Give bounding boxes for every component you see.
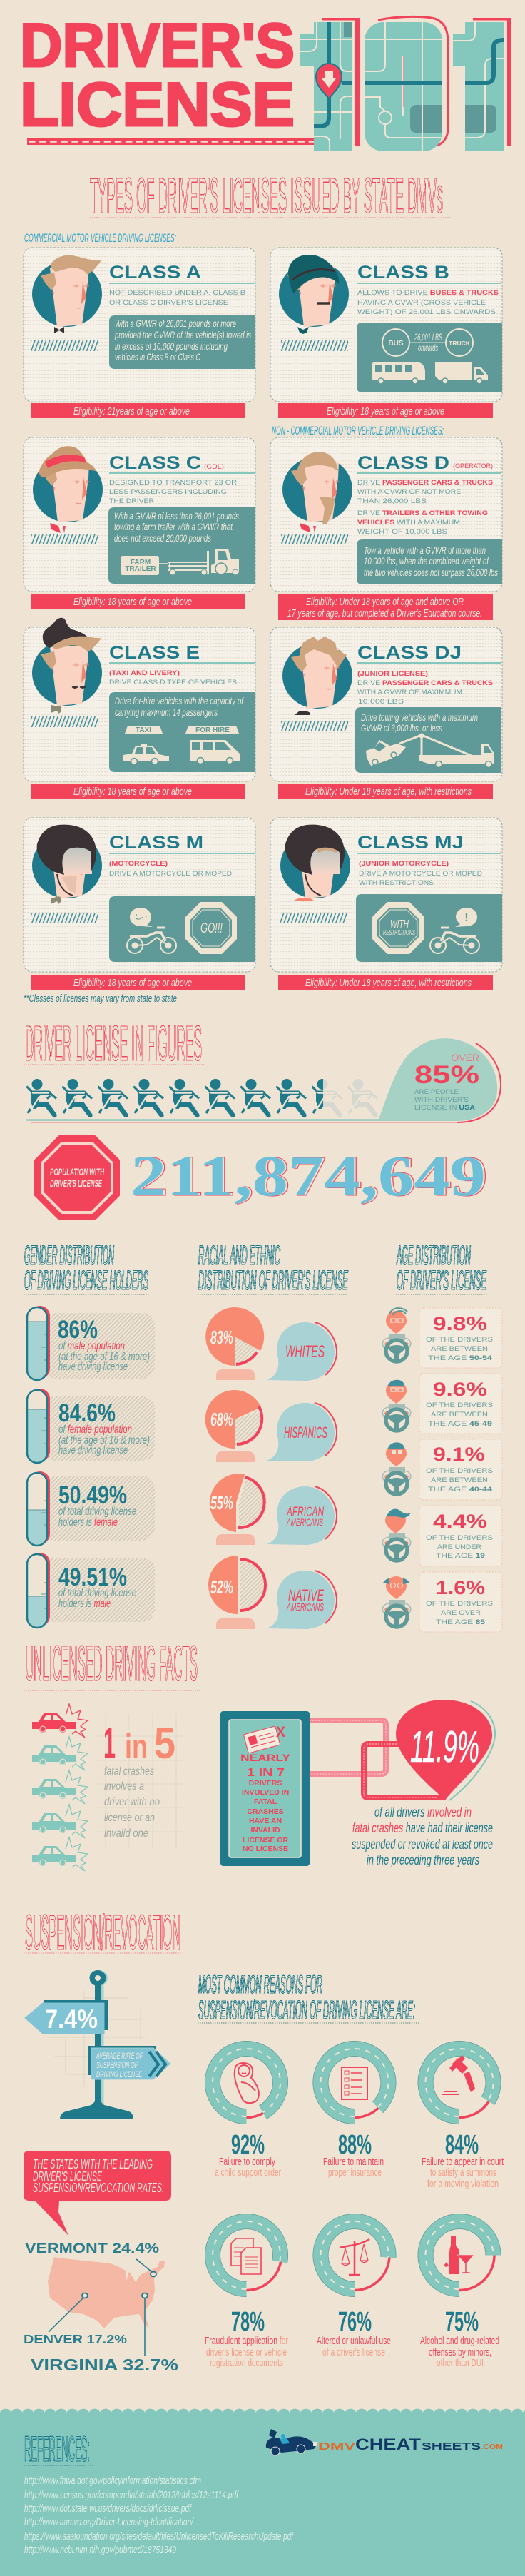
age stat: under 19 bbox=[382, 1506, 502, 1566]
description: class A: OR CLASS C DIRVER'S LICENSE bbox=[109, 299, 228, 307]
stat: 1 in 5: driver with no bbox=[104, 1796, 160, 1808]
info box: class B: 26,001 LBS bbox=[414, 331, 442, 343]
icon: senior driver bbox=[382, 1576, 411, 1627]
age stat: over 85 bbox=[382, 1572, 502, 1632]
logo: dmv cheatsheets: .COM bbox=[481, 2443, 503, 2451]
icon: baby bbox=[235, 2063, 259, 2103]
title: DRIVER'S bbox=[20, 11, 295, 80]
eligibility: class MJ bbox=[278, 975, 493, 990]
text: OF DRIVING LICENSE HOLDERS bbox=[24, 1266, 148, 1296]
age stat: 50-54: ARE BETWEEN bbox=[431, 1345, 488, 1353]
description: class E: DRIVE CLASS D TYPE OF VEHICLES bbox=[109, 679, 237, 686]
gender stat: 84.6 percent female: 84.6% bbox=[58, 1399, 116, 1427]
info box: class D bbox=[357, 539, 502, 584]
callout: leading states bbox=[24, 2151, 171, 2236]
reason: fraud 78 percent: driver's license or vehicle bbox=[206, 2346, 287, 2358]
icon: bottle and glass bbox=[444, 2236, 474, 2274]
age stat: 50-54: 9.8% bbox=[433, 1313, 487, 1334]
icon: tractor with trailer bbox=[159, 549, 239, 575]
age stat: 45-49: OF THE DRIVERS bbox=[426, 1401, 493, 1409]
gender stat: 50.49 percent female: of total driving license bbox=[58, 1506, 136, 1518]
portrait: class A driver bbox=[32, 255, 102, 333]
eligibility: class D: Eligibility: Under 18 years of age and above OR bbox=[306, 596, 464, 608]
reason: alcohol 75 percent: other than DUI bbox=[437, 2357, 484, 2369]
icon: driver with glasses bbox=[382, 1380, 411, 1431]
stat: 1 in 5: 5 bbox=[154, 1719, 175, 1768]
gender stat: 84.6 percent female bbox=[27, 1389, 155, 1463]
map: usa with state labels: VIRGINIA 32.7% bbox=[31, 2356, 178, 2374]
pie: whites 83 percent: 83% bbox=[210, 1327, 233, 1348]
signpost: 7.4 percent bbox=[25, 1970, 170, 2119]
logo: dmv cheatsheets: SHEETS bbox=[422, 2440, 481, 2453]
text: COMMERCIAL MOTOR VEHICLE DRIVING LICENSES: bbox=[24, 231, 176, 245]
road line under title bbox=[27, 138, 314, 145]
stat: 1 in 5: in bbox=[125, 1728, 148, 1766]
panel: nearly 1 in 7: INVALID bbox=[250, 1826, 280, 1835]
icon: five crashed cars bbox=[32, 1704, 88, 1871]
big number: 211,874,649 bbox=[133, 1145, 488, 1208]
portrait: class M rider with helmet bbox=[32, 825, 102, 904]
icon: tow truck bbox=[366, 734, 494, 768]
eligibility: class B: Eligibility: 18 years of age or above bbox=[327, 405, 444, 417]
info box: class C: TRAILER bbox=[125, 565, 156, 573]
stat: 1 in 5: invalid one bbox=[104, 1827, 148, 1840]
reason: fraud 78 percent: registration documents bbox=[210, 2357, 283, 2369]
icon: go sign bbox=[185, 902, 237, 954]
panel: nearly 1 in 7: X bbox=[276, 1724, 285, 1740]
panel: class M bbox=[24, 818, 255, 990]
description: class MJ: (JUNIOR MOTORCYCLE) bbox=[359, 860, 449, 868]
description: class DJ: (JUNIOR LICENSE) bbox=[357, 670, 428, 678]
description: class A bbox=[109, 289, 245, 307]
gender stat: 50.49 percent female: holders is female bbox=[58, 1516, 118, 1528]
description: class D: WEIGHT OF 10,000 LBS bbox=[357, 528, 447, 536]
description: class M: DRIVE A MOTORCYCLE OR MOPED bbox=[109, 870, 232, 878]
stat: 1 in 5: involves a bbox=[104, 1780, 144, 1792]
icon: motorcycle bbox=[430, 928, 479, 953]
text: GENDER DISTRIBUTION bbox=[24, 1241, 114, 1271]
info box: class E: TAXI bbox=[136, 726, 151, 734]
panel: class E bbox=[24, 618, 255, 799]
icon: documents bbox=[231, 2238, 261, 2274]
heading: age distribution bbox=[396, 1241, 488, 1296]
info box: class E: Drive for-hire vehicles with the capacity of bbox=[115, 695, 244, 706]
logo: dmv cheatsheets: CHEAT bbox=[355, 2435, 422, 2453]
description: class DJ: WITH A GVWR OF MAXIMMUM bbox=[357, 689, 462, 696]
description: class E bbox=[109, 669, 237, 686]
icon: alert bubble: ! bbox=[464, 911, 469, 924]
gender stat: 49.51 percent male bbox=[27, 1553, 155, 1628]
callout: leading states: THE STATES WITH THE LEADING bbox=[33, 2157, 153, 2171]
map: usa with state labels: VERMONT 24.4% bbox=[25, 2241, 159, 2256]
logo: dmv cheatsheets: DMV bbox=[318, 2440, 355, 2453]
description: class DJ: 10,000 LBS bbox=[358, 698, 404, 706]
gender stat: 49.51 percent male: holders is male bbox=[58, 1598, 111, 1610]
icon: smile bubble bbox=[130, 908, 153, 927]
title bbox=[20, 11, 295, 139]
icon: restrictions sign: WITH bbox=[390, 918, 409, 930]
stop sign: population with driver's license: DRIVER'S LICENSE bbox=[50, 1177, 102, 1189]
age stat: over 85: 1.6% bbox=[436, 1577, 485, 1598]
eligibility: class D bbox=[278, 594, 493, 620]
callout: leading states: SUSPENSION/REVOCATION RATES: bbox=[33, 2181, 164, 2195]
map: usa with state labels bbox=[24, 2241, 178, 2374]
info box: class B: TRUCK bbox=[449, 340, 471, 347]
info box: class C bbox=[108, 507, 255, 584]
panel: nearly 1 in 7: LICENSE OR bbox=[243, 1836, 288, 1845]
description: class B: HAVING A GVWR (GROSS VEHICLE bbox=[357, 299, 486, 307]
description: class DJ: DRIVE PASSENGER CARS & TRUCKS bbox=[357, 679, 493, 687]
info box: class A: provided the GVWR of the vehicle(s) towed is bbox=[114, 329, 251, 340]
panel: class B bbox=[270, 248, 502, 418]
pie: african americans 55 percent: AFRICAN bbox=[286, 1505, 324, 1520]
eligibility: class E bbox=[31, 784, 245, 799]
heading: class D bbox=[357, 453, 493, 473]
description: class C: THE DRIVER bbox=[109, 497, 154, 505]
map: usa with state labels: DENVER 17.2% bbox=[24, 2332, 127, 2346]
info box: class A: With a GVWR of 26,001 pounds or more bbox=[115, 318, 236, 329]
age stat: under 19: OF THE DRIVERS bbox=[426, 1534, 493, 1542]
reason: insurance 88 percent bbox=[320, 2049, 388, 2179]
eligibility: class C bbox=[31, 594, 245, 609]
reason: insurance 88 percent: Failure to maintain bbox=[323, 2156, 384, 2168]
icon: alert bubble bbox=[455, 908, 477, 927]
heading: class M: CLASS M bbox=[109, 833, 203, 853]
icon: taxi bbox=[123, 744, 169, 765]
reason: child support 92 percent: Failure to comply bbox=[219, 2156, 275, 2168]
icon: gavel bbox=[442, 2055, 475, 2095]
eligibility: class B bbox=[278, 403, 493, 418]
description: class D bbox=[357, 479, 493, 536]
eligibility: class A: Eligibility: 21years of age or above bbox=[73, 405, 190, 417]
pie: whites 83 percent: WHITES bbox=[285, 1342, 325, 1361]
callout: over 85 percent: LICENSE IN USA bbox=[414, 1104, 475, 1112]
panel: nearly 1 in 7: HAVE AN bbox=[249, 1817, 282, 1825]
reason: insurance 88 percent: proper insurance bbox=[328, 2166, 382, 2179]
panel: nearly 1 in 7: 1 IN 7 bbox=[247, 1767, 285, 1779]
reason: child support 92 percent: 92% bbox=[231, 2130, 265, 2160]
icon: go sign: GO!!! bbox=[200, 921, 223, 936]
pin: 11.9 percent bbox=[396, 1700, 495, 1800]
description: class MJ: DRIVE A MOTORCYCLE OR MOPED bbox=[359, 870, 482, 878]
gender stat: 84.6 percent female: (at the age of 16 & more) bbox=[58, 1434, 150, 1446]
stat: 1 in 5: license or an bbox=[104, 1812, 155, 1824]
reason: court 84 percent: 84% bbox=[445, 2130, 479, 2160]
panel: nearly 1 in 7: NEARLY bbox=[240, 1753, 290, 1763]
tube gauge bbox=[27, 1306, 50, 1380]
callout: leading states: DRIVER'S LICENSE bbox=[33, 2169, 103, 2184]
description: class E: (TAXI AND LIVERY) bbox=[109, 669, 180, 677]
portrait: class DJ driver bbox=[282, 637, 352, 715]
description: class C: DESIGNED TO TRANSPORT 23 OR bbox=[109, 479, 237, 487]
age stat: under 19: 4.4% bbox=[433, 1511, 487, 1532]
icon: older driver with glasses bbox=[382, 1308, 411, 1361]
reason: child support 92 percent bbox=[213, 2049, 281, 2179]
gender stat: 50.49 percent female: 50.49% bbox=[58, 1481, 127, 1509]
info box: class A: in excess of 10,000 pounds including bbox=[115, 340, 228, 352]
description: class MJ: WITH RESTRICTIONS bbox=[359, 879, 434, 887]
panel: nearly 1 in 7: FATAL bbox=[254, 1797, 277, 1806]
stat: 1 in 5: fatal crashes bbox=[104, 1765, 154, 1778]
info box: class A: vehicles in Class B or Class C bbox=[115, 351, 201, 362]
info box: class E: carrying maximum 14 passengers bbox=[115, 706, 218, 718]
text: suspended or revoked: of all drivers involved in bbox=[374, 1805, 472, 1820]
portrait: class MJ rider with helmet bbox=[280, 825, 350, 901]
icon: checklist bbox=[342, 2067, 367, 2099]
tube gauge bbox=[27, 1389, 50, 1463]
pie: hispanics 68 percent bbox=[205, 1390, 337, 1462]
info box: class B: BUS bbox=[388, 340, 404, 348]
eligibility: class C: Eligibility: 18 years of age or above bbox=[73, 596, 192, 608]
callout: over 85 percent: OVER bbox=[451, 1052, 479, 1063]
portrait: class E driver bbox=[32, 618, 102, 714]
info box: class E bbox=[109, 692, 255, 772]
gender stat: 84.6 percent female: of female population bbox=[58, 1424, 132, 1436]
signpost: 7.4 percent: DRIVING LICENSE bbox=[96, 2069, 143, 2079]
heading: class C: (CDL) bbox=[204, 463, 224, 471]
reason: fraud 78 percent bbox=[205, 2221, 288, 2369]
description: class B: ALLOWS TO DRIVE BUSES & TRUCKS bbox=[357, 289, 499, 297]
reference list: http://www.fhwa.dot.gov/policyinformation/statistics.cfm bbox=[24, 2475, 201, 2487]
age stat: 45-49: 9.6% bbox=[433, 1379, 487, 1400]
reference list: https://www.aaafoundation.org/sites/default/files/UnlicensedToKillResearchUpdate.pdf bbox=[24, 2530, 294, 2542]
reference list: http://www.aamva.org/Driver-Licensing-Identification/ bbox=[24, 2516, 194, 2528]
description: class M bbox=[109, 860, 232, 878]
eligibility: class M bbox=[31, 975, 245, 990]
info box: class MJ bbox=[356, 894, 502, 962]
eligibility: class M: Eligibility: 18 years of age or above bbox=[73, 977, 192, 989]
pie: native americans 52 percent bbox=[208, 1556, 337, 1629]
panel: class C bbox=[24, 437, 255, 609]
footer panel bbox=[0, 2408, 525, 2576]
gender stat: 49.51 percent male: 49.51% bbox=[58, 1563, 127, 1591]
description: class DJ bbox=[357, 670, 493, 706]
heading: class D: CLASS D bbox=[357, 453, 449, 473]
heading: class C bbox=[109, 453, 224, 473]
reason: altered license 76 percent: 76% bbox=[338, 2307, 372, 2337]
signpost: 7.4 percent: SUSPENSION OF bbox=[96, 2060, 138, 2070]
age stat: under 19: ARE UNDER bbox=[437, 1543, 481, 1551]
age stat: 50-54: OF THE DRIVERS bbox=[426, 1336, 493, 1344]
heading: class A: CLASS A bbox=[109, 263, 201, 283]
heading: class D: (OPERATOR) bbox=[453, 462, 493, 470]
reason: altered license 76 percent: of a driver's license bbox=[322, 2346, 385, 2358]
description: class D: WITH A GVWR OF NOT MORE bbox=[357, 488, 461, 496]
gender stat: 86 percent male bbox=[27, 1306, 155, 1380]
reason: fraud 78 percent: 78% bbox=[231, 2307, 265, 2337]
age stat: 40-44: THE AGE 40-44 bbox=[428, 1486, 493, 1494]
reason: child support 92 percent: a child support order bbox=[215, 2166, 281, 2179]
pie: native americans 52 percent: 52% bbox=[210, 1576, 233, 1598]
description: class MJ bbox=[359, 860, 482, 887]
age stat: 45-49 bbox=[382, 1374, 502, 1434]
big number: 211,874,649 bbox=[131, 1145, 486, 1208]
description: class D: DRIVE TRAILERS & OTHER TOWING bbox=[357, 509, 488, 517]
icon: motorcycle bbox=[127, 928, 176, 953]
pie: native americans 52 percent: AMERICANS bbox=[286, 1601, 324, 1613]
icon: driver with shades bbox=[382, 1442, 411, 1494]
description: class C bbox=[109, 479, 237, 505]
info box: class DJ bbox=[355, 707, 501, 773]
pictogram: seat-belted drivers 85 percent bbox=[26, 1079, 458, 1122]
footer panel: REFERENCES: bbox=[24, 2429, 90, 2469]
gender stat: 86 percent male: (at the age of 16 & more) bbox=[58, 1351, 150, 1363]
stat: 1 in 5: 1 bbox=[103, 1719, 116, 1768]
callout: over 85 percent: WITH DRIVER'S bbox=[414, 1096, 469, 1104]
panel: nearly 1 in 7: CRASHES bbox=[247, 1807, 284, 1816]
panel: class A bbox=[24, 248, 255, 418]
info box: class M bbox=[109, 896, 255, 962]
info box: class E: FOR HIRE bbox=[195, 726, 230, 734]
reference list: http://www.dot.state.wi.us/drivers/docs/drlicissue.pdf bbox=[24, 2503, 192, 2515]
gender stat: 86 percent male: of male population bbox=[58, 1340, 125, 1352]
stat: 1 in 5 bbox=[96, 1714, 184, 1848]
panel: nearly 1 in 7: INVOLVED IN bbox=[242, 1788, 289, 1797]
callout: over 85 percent bbox=[378, 1038, 501, 1122]
info box: class C: With a GVWR of less than 26,001 pounds bbox=[114, 510, 239, 522]
pie: whites 83 percent bbox=[205, 1307, 337, 1381]
heading: class MJ: CLASS MJ bbox=[357, 833, 464, 853]
age stat: over 85: THE AGE 85 bbox=[436, 1618, 486, 1626]
age stat: 45-49: ARE BETWEEN bbox=[431, 1411, 488, 1419]
eligibility: class DJ bbox=[278, 784, 493, 799]
text: suspended or revoked bbox=[352, 1805, 493, 1868]
reason: insurance 88 percent: 88% bbox=[338, 2130, 372, 2160]
reason: altered license 76 percent: Altered or unlawful use bbox=[317, 2335, 391, 2347]
gender stat: 86 percent male: 86% bbox=[58, 1316, 98, 1344]
heading: racial distribution bbox=[198, 1241, 348, 1296]
icon: van bbox=[190, 740, 240, 764]
reason: altered license 76 percent bbox=[317, 2221, 391, 2358]
info box: class A bbox=[109, 315, 255, 369]
info box: class C: FARM bbox=[131, 559, 151, 567]
stop sign: population with driver's license: POPULATION WITH bbox=[50, 1166, 105, 1177]
eligibility: class A bbox=[31, 403, 245, 418]
age stat: 40-44: ARE BETWEEN bbox=[431, 1476, 488, 1484]
reference list bbox=[24, 2475, 294, 2556]
panel: nearly 1 in 7: DRIVERS bbox=[249, 1779, 282, 1788]
reason: alcohol 75 percent bbox=[420, 2221, 499, 2369]
icon: scales bbox=[340, 2239, 369, 2275]
heading: class E: CLASS E bbox=[109, 643, 200, 663]
pie: african americans 55 percent bbox=[210, 1474, 337, 1545]
icon: young driver bbox=[382, 1509, 411, 1561]
heading: references bbox=[24, 2429, 93, 2469]
info box: class DJ: GVWR of 3,000 lbs. or less bbox=[361, 722, 442, 734]
portrait: class B driver bbox=[279, 255, 349, 334]
logo: dmv cheatsheets bbox=[266, 2429, 503, 2455]
description: class D: VEHICLES WITH A MAXIMUM bbox=[357, 519, 460, 527]
tube gauge bbox=[27, 1471, 50, 1546]
reason: court 84 percent bbox=[422, 2049, 504, 2190]
portrait: class C driver bbox=[33, 446, 103, 533]
info box: class DJ: Drive towing vehicles with a maximum bbox=[361, 711, 478, 723]
footnote: **Classes of licenses may vary from state to state bbox=[24, 993, 177, 1005]
heading: racial distribution: RACIAL AND ETHNIC bbox=[198, 1241, 280, 1271]
reason: fraud 78 percent: Fraudulent application for bbox=[205, 2335, 288, 2347]
gender stat: 49.51 percent male: of total driving license bbox=[58, 1587, 136, 1599]
title: LICENSE bbox=[20, 71, 295, 139]
icon: invalid license card bbox=[243, 1726, 280, 1753]
age stat: 50-54: THE AGE 50-54 bbox=[428, 1354, 493, 1362]
panel: nearly 1 in 7: NO LICENSE bbox=[243, 1845, 288, 1853]
info box: class C: towing a farm trailer with a GVWR that bbox=[114, 521, 233, 532]
age stat: over 85: OF THE DRIVERS bbox=[426, 1600, 493, 1608]
pie: native americans 52 percent: NATIVE bbox=[288, 1586, 324, 1604]
callout: over 85 percent: 85% bbox=[414, 1061, 479, 1089]
icon: restrictions sign bbox=[372, 902, 424, 954]
heading: gender distribution bbox=[24, 1241, 149, 1296]
age stat: 40-44: OF THE DRIVERS bbox=[426, 1467, 493, 1475]
reference list: http://www.ncbi.nlm.nih.gov/pubmed/18751349 bbox=[24, 2544, 176, 2556]
reason: alcohol 75 percent: offenses by minors, bbox=[429, 2346, 491, 2358]
age stat: 45-49: THE AGE 45-49 bbox=[428, 1420, 492, 1428]
age stat: 40-44 bbox=[382, 1439, 502, 1500]
description: class D: THAN 26,000 LBS bbox=[357, 497, 427, 505]
icon: restrictions sign: RESTRICTIONS bbox=[383, 929, 415, 937]
portrait: class D driver bbox=[282, 452, 352, 533]
icon: bus bbox=[372, 362, 425, 384]
reason: alcohol 75 percent: 75% bbox=[445, 2307, 479, 2337]
age stat: 50-54 bbox=[382, 1308, 502, 1368]
gender stat: 50.49 percent female bbox=[27, 1471, 155, 1546]
age stat: over 85: ARE OVER bbox=[441, 1609, 481, 1617]
reference list: http://www.census.gov/compendia/statab/2012/tables/12s1114.pdf bbox=[24, 2489, 239, 2501]
panel: class D bbox=[270, 437, 502, 620]
age stat: 40-44: 9.1% bbox=[433, 1444, 485, 1465]
panel: nearly 1 in 7 bbox=[220, 1711, 310, 1866]
heading: most common reasons bbox=[198, 1971, 420, 2024]
heading: class B: CLASS B bbox=[357, 263, 449, 283]
signpost: 7.4 percent: 7.4% bbox=[45, 2004, 98, 2034]
heading: class C: CLASS C bbox=[109, 453, 201, 473]
tube gauge bbox=[27, 1553, 50, 1628]
heading: class DJ: CLASS DJ bbox=[357, 643, 462, 663]
eligibility: class E: Eligibility: 18 years of age or above bbox=[73, 786, 192, 798]
description: class D: DRIVE PASSENGER CARS & TRUCKS bbox=[357, 479, 493, 487]
connector roads bbox=[310, 1720, 445, 1797]
map numerals 101 bbox=[300, 16, 511, 151]
icon: truck bbox=[435, 362, 488, 384]
description: class M: (MOTORCYCLE) bbox=[109, 860, 168, 868]
callout: over 85 percent: ARE PEOPLE bbox=[414, 1088, 459, 1096]
signpost: 7.4 percent: AVERAGE RATE OF bbox=[96, 2051, 143, 2061]
description: class C: LESS PASSENGERS INCLUDING bbox=[109, 488, 227, 496]
gender stat: 86 percent male: have driving license bbox=[58, 1361, 128, 1373]
gender stat: 84.6 percent female: have driving license bbox=[58, 1444, 128, 1456]
description: class A: NOT DESCRIBED UNDER A, CLASS B bbox=[109, 289, 245, 297]
pie: african americans 55 percent: 55% bbox=[210, 1492, 233, 1513]
pie: hispanics 68 percent: HISPANICS bbox=[284, 1424, 327, 1441]
pie: african americans 55 percent: AMERICANS bbox=[286, 1516, 323, 1528]
panel: class MJ bbox=[270, 818, 502, 990]
info box: class B bbox=[357, 323, 502, 392]
info box: class C: does not exceed 20,000 pounds bbox=[114, 532, 211, 544]
pie: hispanics 68 percent: 68% bbox=[210, 1409, 233, 1430]
age stat: under 19: THE AGE 19 bbox=[436, 1552, 485, 1560]
description: class B bbox=[357, 289, 499, 316]
info box: class B: onwards bbox=[418, 342, 438, 353]
stop sign: population with driver's license bbox=[35, 1136, 119, 1219]
panel: class DJ bbox=[270, 627, 502, 799]
description: class B: WEIGHT) OF 26,001 LBS ONWARDS bbox=[357, 308, 496, 316]
